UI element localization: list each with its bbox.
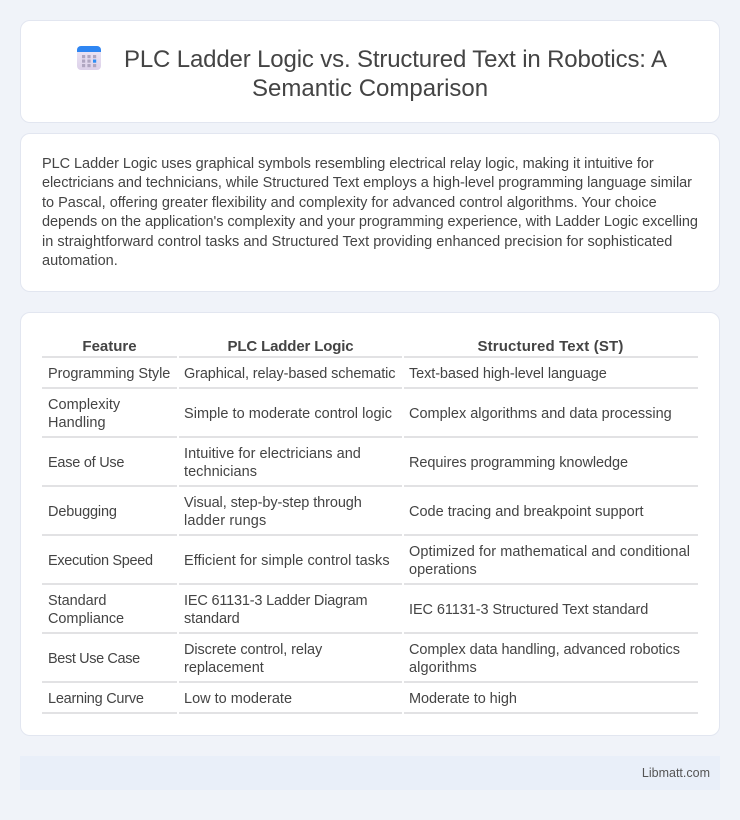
table card: IEC 61131-3 Structured Text standard [409,602,648,618]
footer text: Libmatt.com [642,766,710,780]
table card: Text-based high-level language [409,366,607,382]
summary paragraph: automation. [42,253,118,269]
table card: Moderate to high [409,691,517,707]
table card: Discrete control, relay [184,642,322,658]
summary paragraph: depends on the application's complexity and your programming experience, with Ladder Logic excelling [42,214,698,230]
title: Semantic Comparison [252,75,488,102]
row: learning curve: Learning Curve [48,691,144,707]
summary card [20,133,720,292]
row: execution speed: Execution Speed [48,553,153,569]
table card [20,312,720,736]
title [124,46,667,102]
summary paragraph: electricians and technicians, while Structured Text employs a high-level programming language similar [42,175,692,191]
table card: Optimized for mathematical and conditional [409,544,690,560]
table card: Simple to moderate control logic [184,406,392,422]
table card: Graphical, relay-based schematic [184,366,395,382]
footer [20,756,720,790]
table header: Feature [82,338,137,355]
row: standard compliance [48,593,124,627]
header card [20,20,720,123]
summary paragraph [42,156,698,269]
row: standard compliance: Standard [48,593,106,609]
summary paragraph: to Pascal, offering greater flexibility and complexity for advanced control algorithms. Your choice [42,194,657,210]
table card: Structured Text (ST) [477,338,624,355]
table card: ladder rungs [184,513,266,529]
table card: Visual, step-by-step through [184,495,362,511]
table card: Requires programming knowledge [409,455,628,471]
row: ease of use: Ease of Use [48,455,124,471]
row: standard compliance: Compliance [48,611,124,627]
table card: Complex data handling, advanced robotics [409,642,680,658]
table card: standard [184,611,240,627]
table card: operations [409,562,477,578]
icon: calendar [77,46,101,70]
table card: replacement [184,660,264,676]
table card: IEC 61131-3 Ladder Diagram [184,593,367,609]
table card: Intuitive for electricians and [184,446,361,462]
table card: technicians [184,464,257,480]
summary paragraph: in straightforward control tasks and Structured Text providing enhanced precision for sophisticated [42,234,672,250]
table card: PLC Ladder Logic [228,338,353,355]
table card: Low to moderate [184,691,292,707]
table card: algorithms [409,660,477,676]
summary paragraph: PLC Ladder Logic uses graphical symbols resembling electrical relay logic, making it intuitive for [42,156,654,172]
table card: Complex algorithms and data processing [409,406,672,422]
title: PLC Ladder Logic vs. Structured Text in Robotics: A [124,46,667,73]
row: complexity handling: Handling [48,415,106,431]
table card: Code tracing and breakpoint support [409,504,644,520]
row: best use case: Best Use Case [48,651,140,667]
row: complexity handling [48,397,120,431]
row: complexity handling: Complexity [48,397,120,413]
table card: Efficient for simple control tasks [184,553,390,569]
row: debugging: Debugging [48,504,117,520]
row: programming style: Programming Style [48,366,170,382]
